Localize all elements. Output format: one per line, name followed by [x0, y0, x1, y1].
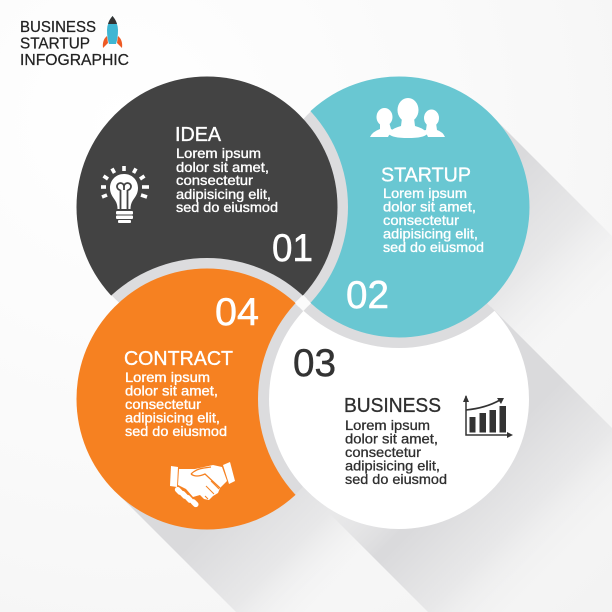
panel text: startup: Lorem ipsum — [383, 185, 467, 201]
panel text: startup — [381, 164, 484, 255]
circle 01 dark panel — [76, 76, 338, 296]
icon: people group — [370, 98, 445, 138]
title: STARTUP — [20, 36, 90, 52]
panel text: contract: adipisicing elit, — [125, 410, 220, 426]
panel text: idea: adipisicing elit, — [176, 186, 271, 202]
panel text: startup: sed do eiusmod — [383, 239, 484, 255]
icon: handshake — [170, 462, 235, 508]
circle 02 teal panel — [310, 76, 530, 338]
panel text: startup: dolor sit amet, — [383, 198, 476, 214]
number 04: 04 — [215, 291, 259, 334]
panel text: business — [344, 395, 447, 487]
white base of circle 03 — [269, 311, 529, 529]
panel text: startup: STARTUP — [381, 164, 471, 186]
panel text: idea — [175, 124, 278, 215]
panel text: business: dolor sit amet, — [345, 430, 438, 446]
panel text: startup: adipisicing elit, — [383, 226, 478, 242]
panel text: contract: Lorem ipsum — [125, 369, 210, 385]
panel text: contract: CONTRACT — [124, 348, 233, 370]
panel text: contract: consectetur — [125, 396, 201, 412]
icon: rocket — [103, 16, 122, 48]
panel text: idea: dolor sit amet, — [176, 159, 269, 175]
panel text: business: sed do eiusmod — [345, 471, 447, 487]
title — [20, 19, 129, 69]
panel text: idea: sed do eiusmod — [176, 199, 278, 215]
panel text: idea: consectetur — [176, 172, 253, 188]
circle 04 orange panel — [76, 268, 296, 530]
gray rings between circles — [77, 77, 529, 529]
panel text: idea: IDEA — [175, 124, 222, 146]
panel text: idea: Lorem ipsum — [176, 145, 261, 161]
number 03: 03 — [293, 342, 336, 385]
icon: light bulb — [101, 166, 149, 223]
panel text: business: Lorem ipsum — [345, 417, 430, 433]
title: INFOGRAPHIC — [20, 52, 129, 69]
panel text: contract — [124, 348, 233, 439]
panel text: business: BUSINESS — [344, 395, 441, 417]
panel text: contract: sed do eiusmod — [125, 423, 227, 439]
title: BUSINESS — [20, 19, 96, 36]
number 01: 01 — [272, 227, 313, 270]
panel text: business: adipisicing elit, — [345, 458, 440, 474]
number 02: 02 — [346, 274, 389, 317]
long shadows — [115, 115, 612, 612]
icon: bar chart — [463, 395, 513, 438]
panel text: contract: dolor sit amet, — [125, 382, 218, 398]
panel text: business: consectetur — [345, 444, 421, 460]
panel text: startup: consectetur — [383, 212, 459, 228]
